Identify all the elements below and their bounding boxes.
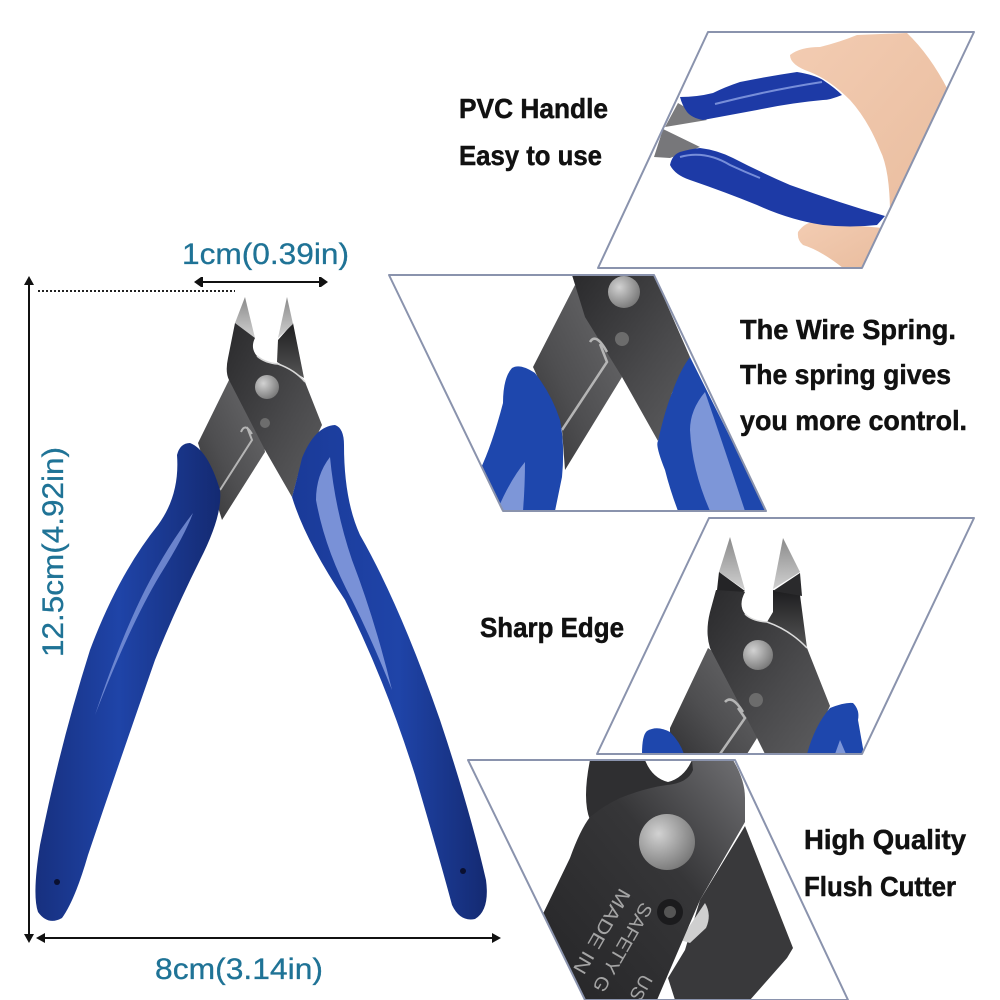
panel: wire spring photo (389, 275, 767, 511)
pivot rivet (255, 375, 279, 399)
right handle (657, 357, 767, 511)
label: easy to use: Easy to use (459, 140, 602, 171)
engraved text: SAFETY G (588, 898, 656, 996)
label: high quality flush cutter: Flush Cutter (804, 871, 956, 902)
label: wire spring: The spring gives (740, 359, 951, 390)
left jaw (719, 537, 745, 590)
silver disc (680, 903, 709, 943)
back arm (670, 648, 757, 754)
dimension: jaw width: 1cm(0.39in) (182, 238, 349, 271)
left handle (35, 443, 220, 921)
label: wire spring: you more control. (740, 405, 967, 436)
pliers back arm (198, 380, 265, 520)
left handle (480, 366, 563, 511)
label: high quality flush cutter: High Quality (804, 824, 966, 855)
label: PVC handle: PVC Handle (459, 93, 608, 124)
pliers front plate (227, 323, 322, 497)
pliers left jaw tip (235, 297, 255, 338)
front plate (572, 275, 690, 441)
panel: flush cutter photo (468, 760, 848, 1000)
dimension: jaw width (38, 238, 349, 291)
dimension: height (24, 276, 70, 943)
panel: flush cutter photo: MADE IN (568, 884, 634, 977)
dimension: width: 8cm(3.14in) (155, 953, 323, 986)
label: wire spring (740, 314, 967, 436)
panel: sharp edge photo (597, 518, 974, 754)
upper handle (680, 72, 842, 120)
label: wire spring: The Wire Spring. (740, 314, 956, 345)
label: high quality flush cutter (804, 824, 966, 902)
hand (790, 33, 948, 215)
right jaw (767, 590, 807, 648)
back arm (533, 285, 622, 470)
lower handle (670, 148, 885, 226)
main pliers illustration (35, 297, 487, 921)
metal arms (665, 103, 707, 127)
back jaw (586, 761, 693, 818)
label: sharp edge: Sharp Edge (480, 612, 624, 643)
front plate (540, 760, 745, 1000)
pliers right jaw (277, 323, 304, 378)
front plate (708, 590, 830, 754)
spring (720, 700, 745, 754)
left handle (642, 728, 684, 754)
spring (562, 339, 607, 430)
panel: PVC handle photo (598, 32, 974, 268)
back plate (668, 826, 793, 1000)
right handle (292, 425, 487, 919)
dimension: height: 12.5cm(4.92in) (37, 447, 70, 657)
right handle (807, 703, 864, 754)
dimension: width (36, 933, 501, 986)
spring (220, 427, 252, 490)
